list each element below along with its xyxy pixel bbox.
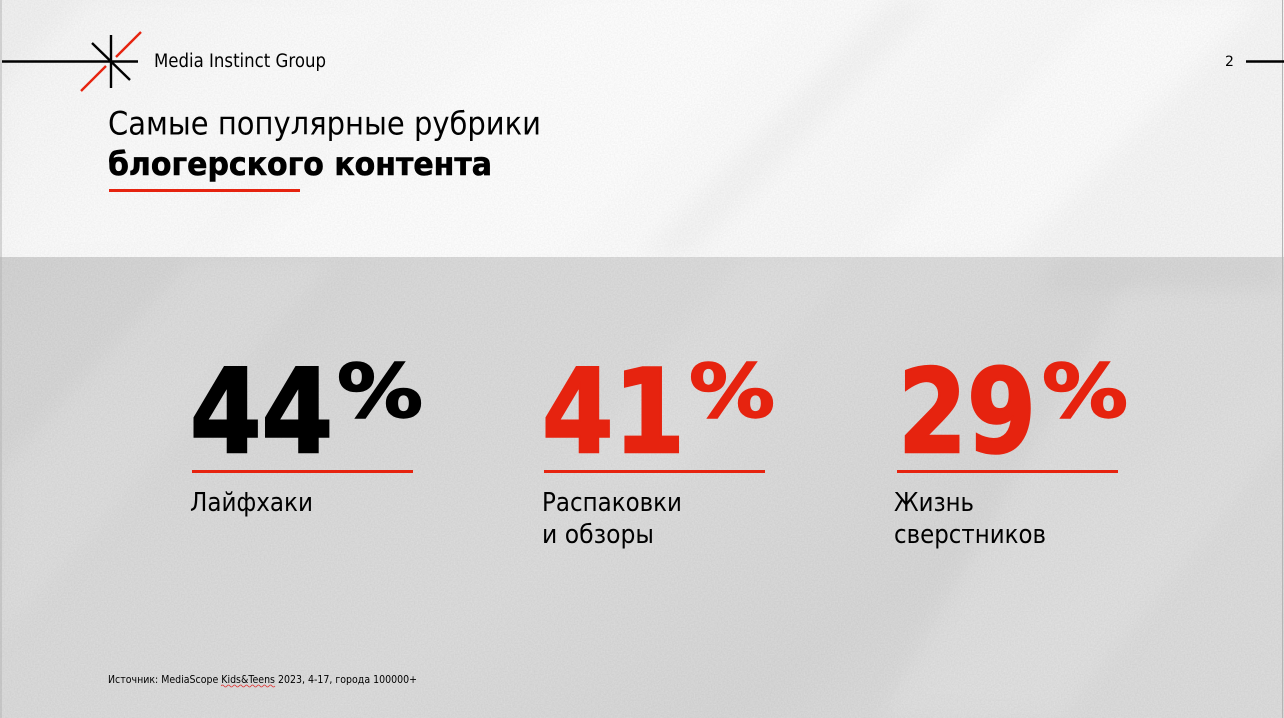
stat: Жизнь сверстников 29%: сверстников [894, 520, 1046, 550]
stat: Распаковки и обзоры 41%: и обзоры [542, 520, 654, 550]
stat: Распаковки и обзоры 41%: % [689, 349, 775, 435]
title [108, 104, 541, 183]
logo text: Media Instinct Group [154, 51, 326, 72]
stat: Лайфхаки 44% [190, 345, 423, 518]
page number: 2 [1225, 54, 1234, 70]
source note: Источник: MediaScope Kids&Teens 2023, 4-17, города 100000+ [108, 673, 417, 686]
stat: Лайфхаки 44%: Лайфхаки [190, 488, 313, 518]
stat: Распаковки и обзоры 41%: Распаковки [542, 488, 682, 518]
stat: Жизнь сверстников 29%: Жизнь [894, 488, 974, 518]
stat: Лайфхаки 44%: % [337, 349, 423, 435]
stat: Распаковки и обзоры 41%: 41 [542, 345, 685, 480]
title: блогерского контента [108, 145, 492, 183]
stat: Жизнь сверстников 29%: 29 [898, 345, 1036, 480]
page number [1225, 54, 1284, 70]
stat: Распаковки и обзоры 41% [542, 345, 775, 550]
title underline [109, 189, 300, 192]
top background panel [0, 0, 1284, 257]
stat: Жизнь сверстников 29%: % [1042, 349, 1128, 435]
bottom background panel [0, 257, 1284, 718]
title: Самые популярные рубрики [108, 104, 541, 142]
logo icon [2, 32, 141, 91]
stat: Лайфхаки 44%: 44 [190, 345, 333, 480]
stat: Жизнь сверстников 29% [894, 345, 1128, 550]
